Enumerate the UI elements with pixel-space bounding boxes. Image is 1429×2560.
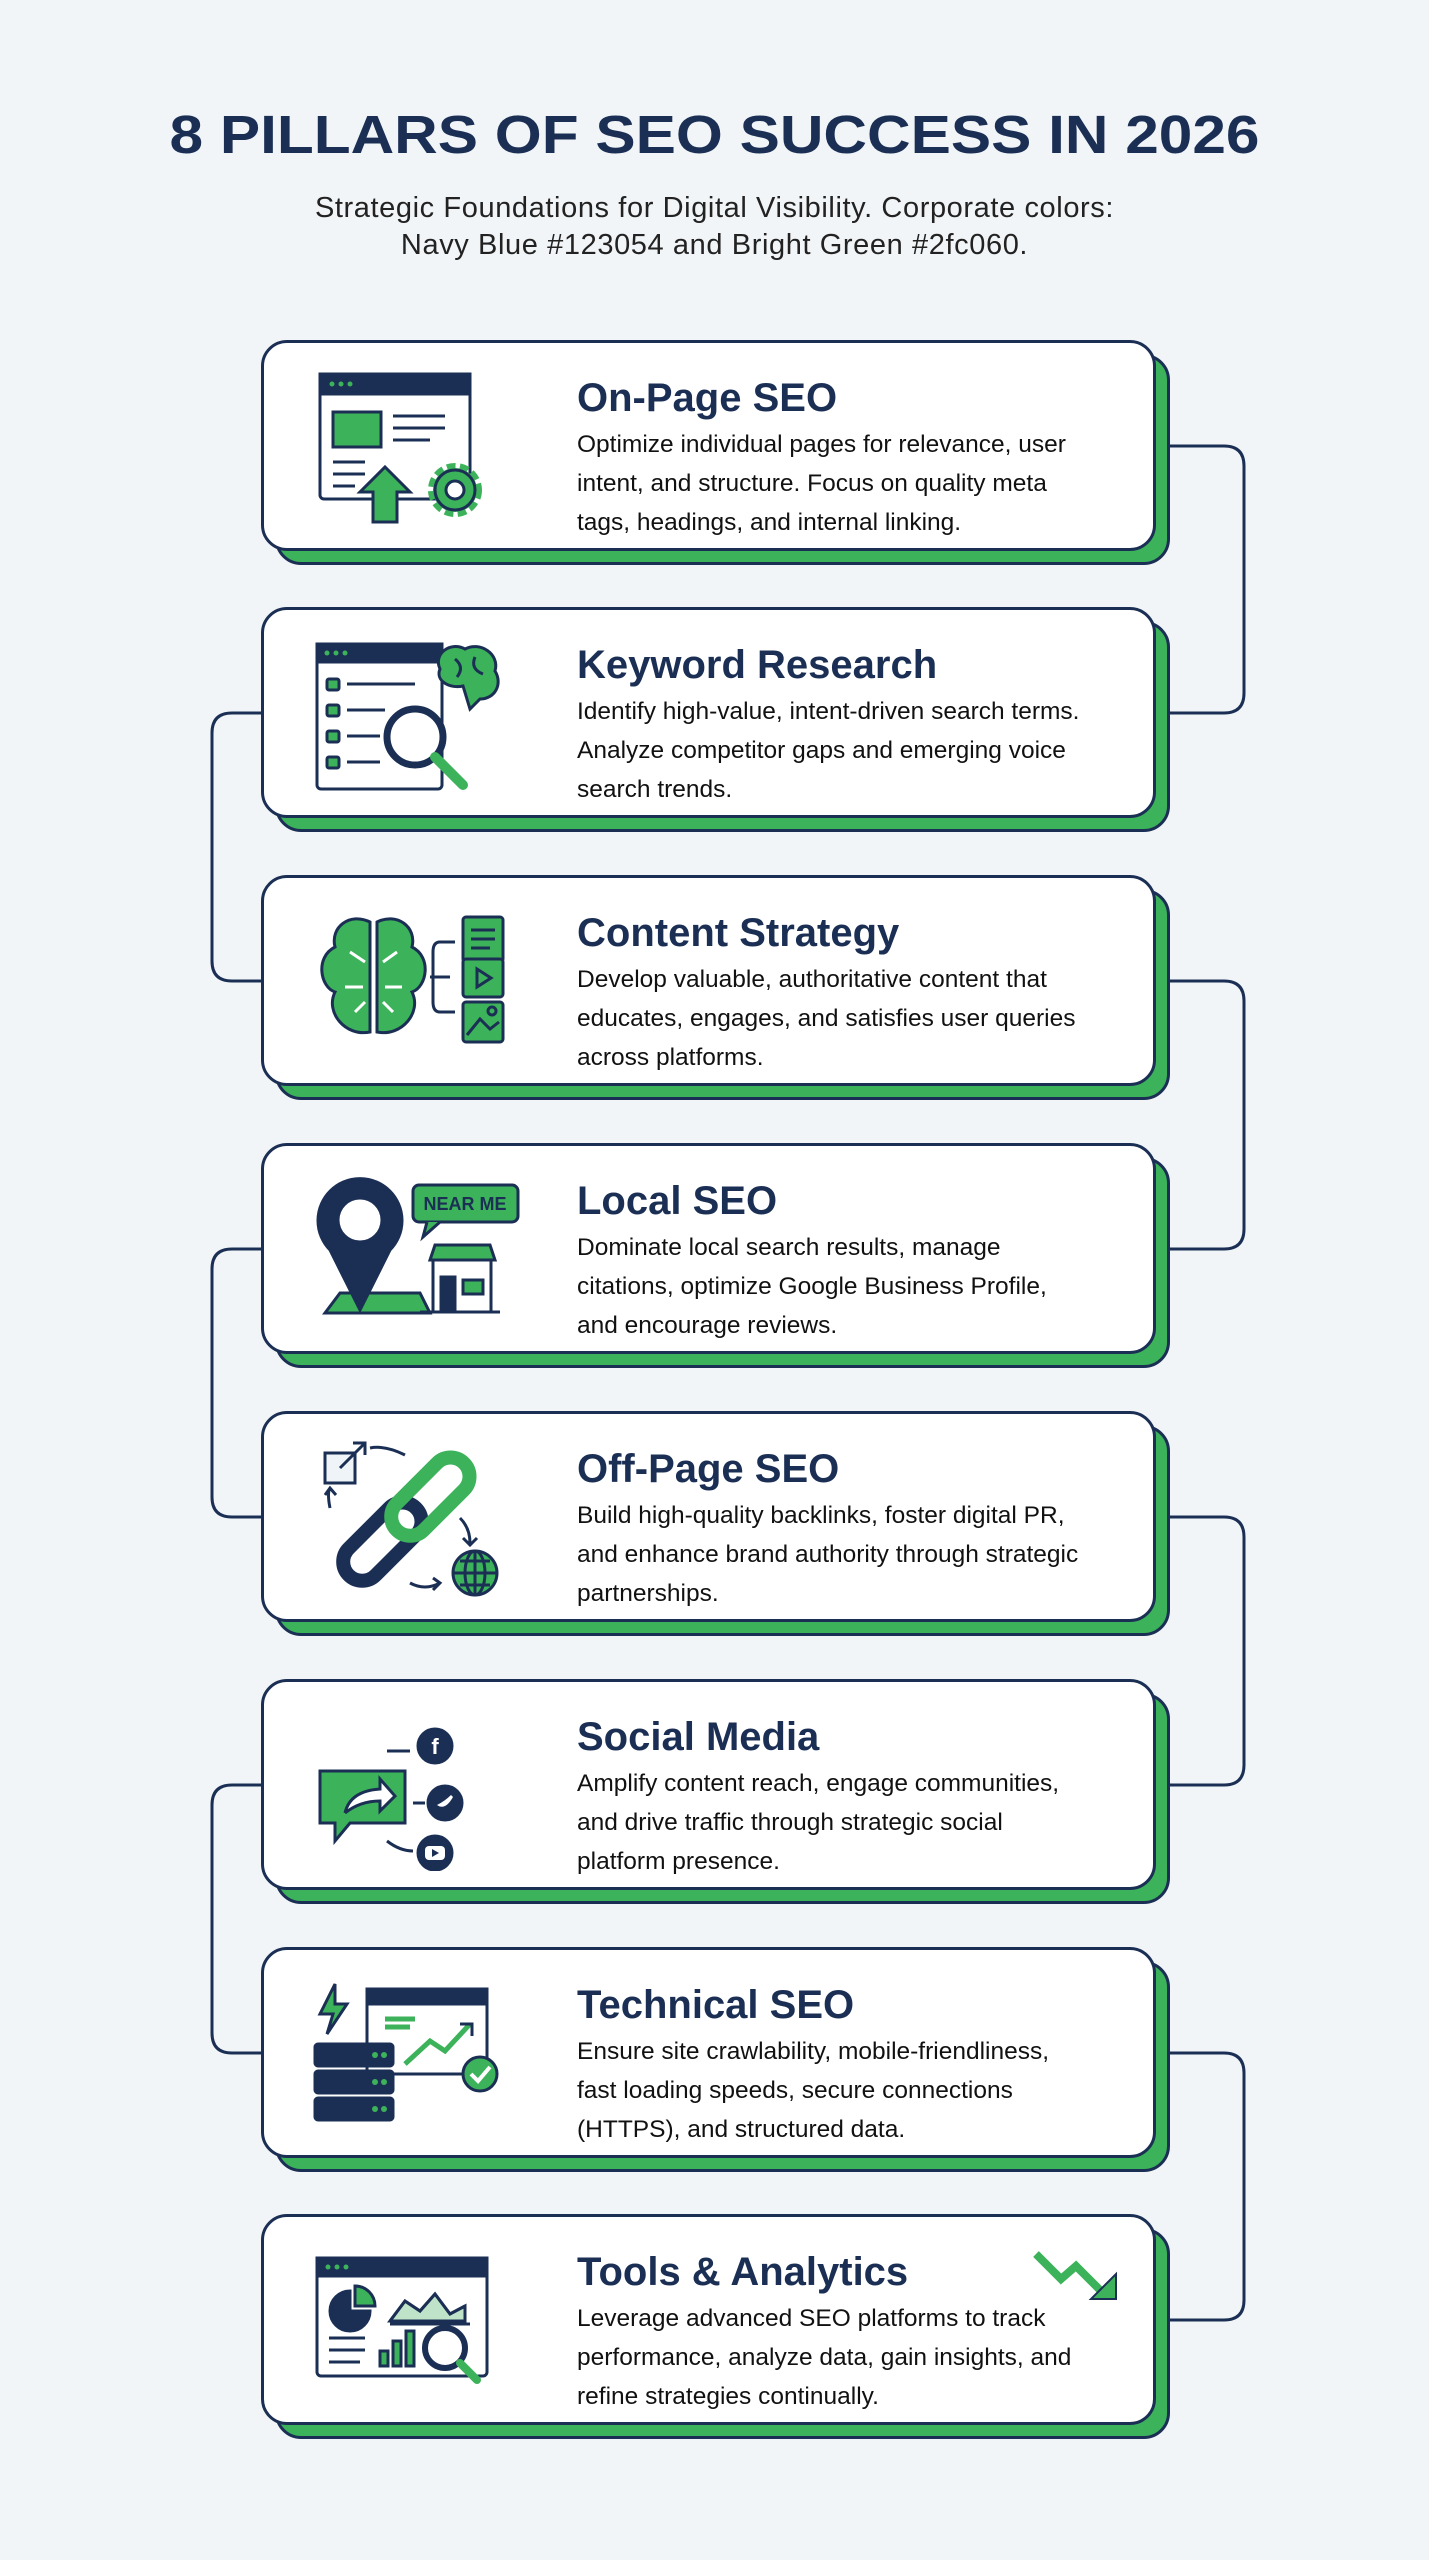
card: Local SEO [261,1143,1170,1368]
heading: Content Strategy [577,911,899,955]
text: and drive traffic through strategic social [577,1809,1003,1836]
text: fast loading speeds, secure connections [577,2077,1013,2104]
heading: Off-Page SEO [577,1447,839,1491]
text: Develop valuable, authoritative content that [577,966,1047,993]
text: tags, headings, and internal linking. [577,509,961,536]
icon: pin and store [316,1177,520,1314]
text: citations, optimize Google Business Profile, [577,1273,1047,1300]
text: and enhance brand authority through strategic [577,1541,1078,1568]
heading: Social Media [577,1715,819,1759]
card: Social Media [261,1679,1170,1904]
title: 8 PILLARS OF SEO SUCCESS IN 2026 [170,105,1260,165]
text: Analyze competitor gaps and emerging voice [577,737,1066,764]
heading: On-Page SEO [577,376,837,420]
subtitle: Navy Blue #123054 and Bright Green #2fc060. [401,229,1028,261]
card: On-Page SEO [261,340,1170,565]
text [577,698,1080,803]
text: Build high-quality backlinks, foster digital PR, [577,1502,1065,1529]
text: partnerships. [577,1580,719,1607]
text: refine strategies continually. [577,2383,879,2410]
text: performance, analyze data, gain insights, and [577,2344,1071,2371]
text [577,2038,1049,2143]
card: Keyword Research [261,607,1170,832]
icon: brain and content [320,916,504,1044]
text [577,1502,1078,1607]
heading: Technical SEO [577,1983,854,2027]
icon: chain links [324,1442,498,1596]
text: Dominate local search results, manage [577,1234,1001,1261]
text: across platforms. [577,1044,764,1071]
text [577,431,1066,536]
text: and encourage reviews. [577,1312,837,1339]
heading: Keyword Research [577,643,937,687]
heading: Tools & Analytics [577,2250,908,2294]
text: Amplify content reach, engage communities, [577,1770,1059,1797]
card: Tools & Analytics [261,2214,1170,2439]
icon: dashboard [316,2256,488,2384]
text: (HTTPS), and structured data. [577,2116,905,2143]
text [577,1770,1059,1875]
text: platform presence. [577,1848,780,1875]
text: search trends. [577,776,732,803]
icon: pin and store: NEAR ME [423,1194,507,1214]
text: Ensure site crawlability, mobile-friendliness, [577,2038,1049,2065]
icon: trend arrow [1033,2251,1117,2300]
text [577,966,1075,1071]
text: Identify high-value, intent-driven search terms. [577,698,1080,725]
subtitle [315,192,1114,261]
heading: Local SEO [577,1179,777,1223]
text: intent, and structure. Focus on quality meta [577,470,1047,497]
card: Technical SEO [261,1947,1170,2172]
subtitle: Strategic Foundations for Digital Visibility. Corporate colors: [315,192,1114,224]
icon: share bubble and social [318,1728,464,1871]
card: Off-Page SEO [261,1411,1170,1636]
text: Optimize individual pages for relevance, user [577,431,1066,458]
text: educates, engages, and satisfies user queries [577,1005,1075,1032]
text [577,1234,1047,1339]
icon: search list brain [316,642,500,790]
text: Leverage advanced SEO platforms to track [577,2305,1045,2332]
icon: share bubble and social: f [431,1734,439,1759]
text [577,2305,1071,2410]
card: Content Strategy [261,875,1170,1100]
icon: page with gear [318,372,482,524]
icon: server and chart [314,1983,498,2122]
